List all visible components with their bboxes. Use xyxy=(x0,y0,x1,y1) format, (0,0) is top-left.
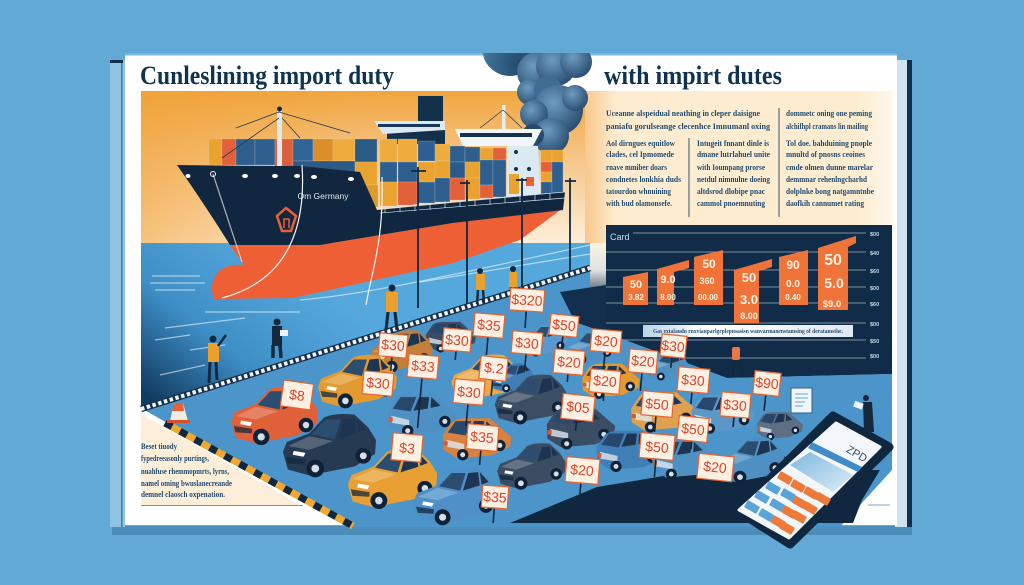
car amber xyxy=(348,448,437,509)
right text block: clades, cel Ipmomede xyxy=(606,149,674,159)
bottom dark wedge xyxy=(510,455,880,523)
tag xyxy=(377,333,408,372)
panel: harbour sky xyxy=(141,91,591,244)
car xyxy=(495,375,568,424)
traffic cone xyxy=(167,403,190,423)
water highlights xyxy=(150,245,590,375)
display xyxy=(790,452,853,492)
keys orange xyxy=(770,471,831,535)
right text block: alchifhpl cramans lin mailing xyxy=(786,121,869,131)
ship logo xyxy=(277,208,296,231)
car navy xyxy=(283,414,376,477)
bar 4: 8.00 xyxy=(740,311,758,321)
price tags xyxy=(280,288,781,524)
car xyxy=(443,418,511,460)
panel: harbour sea xyxy=(141,243,590,408)
tag xyxy=(510,331,543,372)
infographic canvas xyxy=(110,53,912,548)
tag xyxy=(626,349,658,392)
tag xyxy=(719,392,751,428)
bar 1: 3.82 xyxy=(628,293,644,302)
car red xyxy=(231,386,318,445)
rear bridge xyxy=(455,105,542,200)
tag: $30 xyxy=(366,374,391,392)
chart label: Card xyxy=(610,232,630,242)
cream note text: demnel claosch oxpenation. xyxy=(141,489,225,499)
tag: $3 xyxy=(399,439,416,457)
right text block: altdsrod dlobipe pnac xyxy=(697,186,765,196)
tag xyxy=(588,329,622,372)
tag xyxy=(391,433,423,462)
tag: $35 xyxy=(483,488,507,506)
cream note text xyxy=(141,441,232,499)
display bar xyxy=(808,442,862,472)
tag xyxy=(477,356,508,397)
parked cars xyxy=(231,322,803,525)
book edge right xyxy=(895,60,912,527)
deck rail xyxy=(380,192,565,213)
bar 6: 5.0 xyxy=(824,275,844,291)
bar 1 xyxy=(623,272,648,305)
tag: $05 xyxy=(566,398,591,416)
tag: $20 xyxy=(570,461,595,479)
right text block: mnultd of pnosns ceoines xyxy=(786,149,866,159)
tag: $35 xyxy=(477,316,502,334)
chart xyxy=(606,225,892,378)
worker 2 xyxy=(272,318,288,358)
car xyxy=(582,364,640,399)
book spine left xyxy=(110,60,125,527)
bar 5: 0.40 xyxy=(785,293,801,302)
axis labels: $00 xyxy=(870,354,879,360)
tag xyxy=(508,288,545,329)
main mast xyxy=(222,106,350,166)
bar 2: 9.0 xyxy=(660,274,676,286)
cream note text: fypedreeasonly purtings, xyxy=(141,453,209,463)
tag: $30 xyxy=(457,383,482,401)
tag: $20 xyxy=(557,353,582,371)
bar 3: 50 xyxy=(702,257,716,271)
tag xyxy=(280,380,314,410)
right text block: with bud olamonsefe. xyxy=(606,198,672,208)
right text block: condnetes lonkhia duds xyxy=(606,174,682,184)
quay fade at text panel edge xyxy=(590,243,606,303)
tag xyxy=(362,371,394,396)
tag xyxy=(751,371,781,412)
book shadow xyxy=(112,526,912,535)
tag: $90 xyxy=(755,374,780,392)
bar 3 xyxy=(694,250,723,305)
bar 6 xyxy=(818,236,856,310)
hull black xyxy=(177,165,565,245)
tag: $20 xyxy=(631,352,656,370)
car xyxy=(646,352,688,381)
right text block: rnave mmiber doars xyxy=(606,162,668,172)
tag: $50 xyxy=(681,420,706,438)
bar 4 xyxy=(734,259,772,323)
axis labels: $40 xyxy=(870,251,879,257)
right text block: cmde olmen dunne marelar xyxy=(786,162,873,172)
car xyxy=(491,363,534,392)
tag: $33 xyxy=(411,357,436,375)
car xyxy=(388,394,456,436)
tag: $30 xyxy=(723,396,748,414)
right text block: demmnar rehenlngcharhd xyxy=(786,174,867,184)
lamp posts xyxy=(411,167,576,308)
keys blue xyxy=(744,481,796,522)
tag: $35 xyxy=(470,428,495,446)
tag: $50 xyxy=(645,438,670,456)
white corner at right xyxy=(853,470,892,523)
person with paper xyxy=(853,395,874,432)
calculator body xyxy=(738,416,889,544)
right text block: netdul nimnulne doeing xyxy=(697,174,771,184)
tag xyxy=(560,393,595,433)
axis labels: $60 xyxy=(870,269,879,275)
tag: $50 xyxy=(552,316,577,334)
right text block: daofkih cannumet rating xyxy=(786,198,865,208)
right text block: dmane lutrlahuel unite xyxy=(697,149,770,159)
right text block: Aol dirngues equitlow xyxy=(606,138,676,148)
bar 5: 0.0 xyxy=(786,279,800,290)
car xyxy=(547,407,615,449)
car xyxy=(318,355,397,408)
inspector figure xyxy=(731,344,743,377)
tag: $30 xyxy=(681,371,706,389)
calculator xyxy=(738,416,889,544)
bar 2 xyxy=(657,260,689,305)
tag xyxy=(564,457,600,495)
right text block: paniafu gorulseange clecenhce Imnumanl oxing xyxy=(606,121,771,131)
right text block: dolplnke bong natgamntnbe xyxy=(786,186,874,196)
car xyxy=(565,331,614,364)
tag xyxy=(659,334,687,369)
funnel and front bridge xyxy=(374,96,445,144)
bar 1: 50 xyxy=(630,279,642,291)
car blue xyxy=(413,468,498,525)
chart caption: Gas extalaudn rnxviauparlgrplepnsasisn wanvarmanenstamsing of deratamsthe. xyxy=(653,328,843,335)
worker 5 xyxy=(509,266,517,292)
bar 4: 3.0 xyxy=(740,292,758,307)
worker 4 xyxy=(476,268,485,304)
axis labels: $60 xyxy=(870,302,879,308)
tag xyxy=(676,415,709,450)
tag xyxy=(480,485,509,524)
calculator label: ZPD xyxy=(844,444,869,465)
tag xyxy=(676,367,710,405)
quay railing xyxy=(141,268,590,409)
cream note text: namel oming bwuslanecreande xyxy=(141,478,232,488)
panel: text background xyxy=(585,91,893,341)
tag xyxy=(637,433,675,478)
tag xyxy=(403,354,439,429)
car xyxy=(716,437,784,484)
car xyxy=(370,330,433,373)
book page xyxy=(125,53,897,525)
tag xyxy=(552,349,585,383)
grid lines xyxy=(606,233,866,358)
right text block xyxy=(606,108,874,217)
cars back rows xyxy=(426,322,476,353)
bar 3: 00.00 xyxy=(698,293,719,302)
axis labels: $00 xyxy=(870,286,879,292)
axis labels xyxy=(870,232,879,360)
bar 5: 90 xyxy=(786,258,800,272)
tag: $50 xyxy=(645,395,670,413)
right text block: Intugeit fnnant dinle is xyxy=(697,138,770,148)
car xyxy=(757,412,803,440)
ship name: Om Germany xyxy=(297,191,349,201)
tag: $30 xyxy=(661,337,686,355)
axis labels: $00 xyxy=(870,322,879,328)
car xyxy=(520,324,567,356)
dark shadow behind lot xyxy=(560,285,606,333)
smoke cloud xyxy=(482,53,592,151)
axis labels: $00 xyxy=(870,232,879,238)
right text block: tatourdon whnuining xyxy=(606,186,672,196)
bar 3: 360 xyxy=(699,276,715,286)
right text block: cammol pnoemnuting xyxy=(697,198,766,208)
cream note text: Beset tiuody xyxy=(141,441,178,451)
mooring ropes xyxy=(213,165,382,305)
tag xyxy=(465,424,499,466)
bar 6: $9.0 xyxy=(823,299,841,310)
car xyxy=(497,443,566,490)
containers xyxy=(209,139,563,207)
panel: car lot xyxy=(141,268,892,527)
worker 1 xyxy=(208,335,226,383)
tag xyxy=(640,391,674,433)
worker 3 xyxy=(386,284,398,330)
portholes xyxy=(186,174,354,181)
car xyxy=(691,395,755,434)
panel: cream note corner xyxy=(141,414,300,505)
car xyxy=(451,354,519,401)
workers xyxy=(208,266,517,383)
car xyxy=(596,431,664,472)
title left: Cunleslining import duty xyxy=(140,61,394,90)
calculator face xyxy=(739,423,880,538)
tag xyxy=(547,314,579,354)
tag xyxy=(471,313,505,356)
tag xyxy=(451,379,485,427)
right text block: Tol doe. bahduining pnople xyxy=(786,138,872,148)
car xyxy=(652,439,718,480)
tag: $30 xyxy=(515,334,540,352)
title right: with impirt dutes xyxy=(604,61,782,90)
bar 4: 50 xyxy=(742,270,756,285)
bar 2: 8.00 xyxy=(660,293,676,302)
right text block: dommetc oning one peming xyxy=(786,108,873,118)
bar 6: 50 xyxy=(824,252,842,269)
bar 5 xyxy=(779,250,808,305)
tag xyxy=(588,369,621,402)
hazard strip xyxy=(165,423,353,526)
document icon xyxy=(791,388,812,413)
chart panel xyxy=(606,225,892,378)
axis labels: $50 xyxy=(870,339,879,345)
tag xyxy=(441,328,472,361)
cream note text: nuahfuse rhemmopmrts, lyrns, xyxy=(141,466,229,476)
tag xyxy=(696,453,734,487)
chart caption xyxy=(643,325,853,337)
right text block: with Ioumpang prorse xyxy=(697,162,765,172)
tag: $20 xyxy=(703,458,728,476)
tag: $8 xyxy=(288,386,306,404)
tag: $20 xyxy=(593,372,618,390)
tag: $20 xyxy=(594,332,619,350)
car xyxy=(631,392,697,433)
container ship xyxy=(177,96,565,305)
tag: $30 xyxy=(381,336,406,354)
hull red xyxy=(212,208,563,299)
tag: $30 xyxy=(445,331,470,349)
tag: $320 xyxy=(511,291,543,309)
tag: $.2 xyxy=(483,359,505,377)
right text block: Uceanne alspeidual neathing in cleper daisigne xyxy=(606,108,760,118)
